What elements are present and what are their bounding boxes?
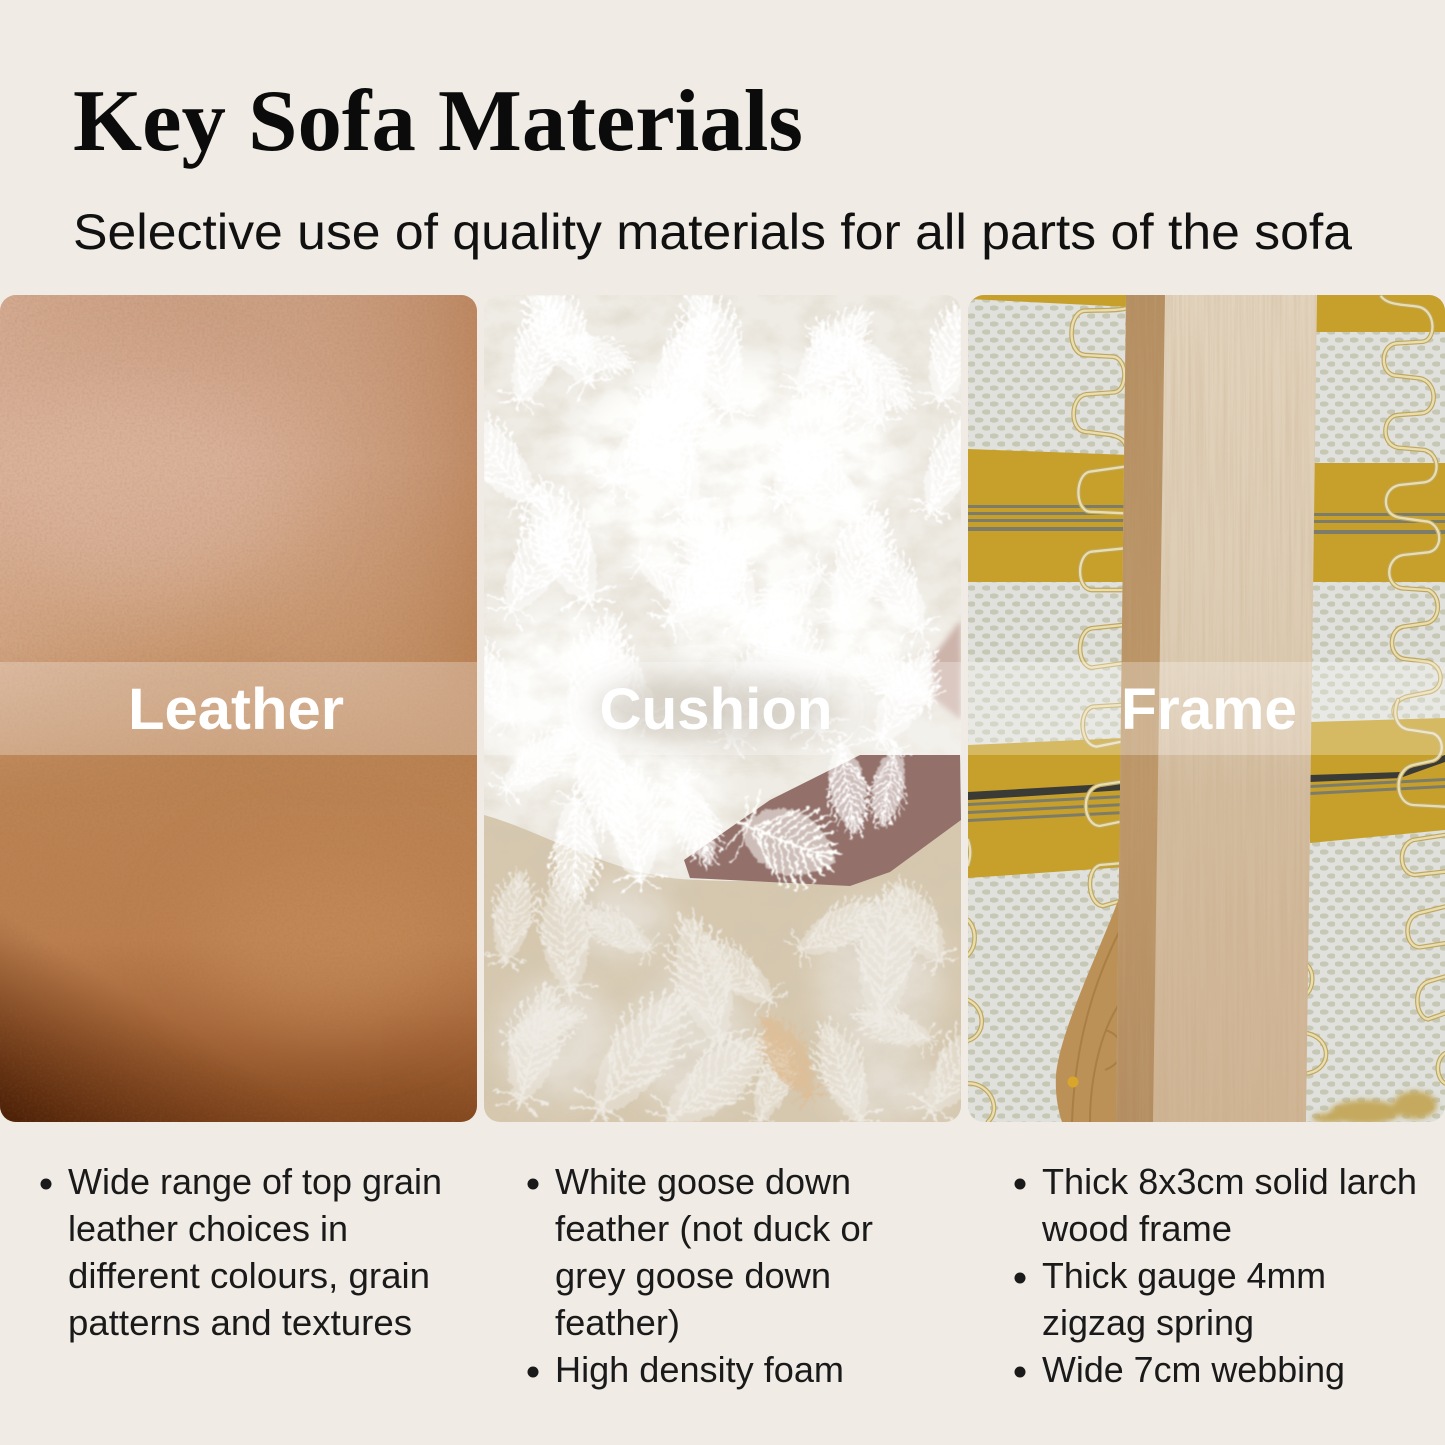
text block: frame bullets: Wide 7cm webbing xyxy=(1042,1349,1345,1390)
soft shade behind label xyxy=(591,678,841,738)
panel: leather xyxy=(0,295,477,1122)
panel: cushion xyxy=(429,260,1024,1154)
wood flare xyxy=(1056,898,1125,1122)
title: Key Sofa Materials xyxy=(73,73,803,170)
text block: cushion bullets: grey goose down xyxy=(555,1255,831,1296)
panel: frame xyxy=(968,295,1445,1124)
text block: frame bullets: wood frame xyxy=(1041,1208,1232,1249)
peach feather xyxy=(754,1008,830,1110)
hand xyxy=(684,755,961,886)
label band: frame: Frame xyxy=(1121,677,1297,742)
text block: cushion bullets: White goose down xyxy=(555,1161,851,1202)
text block: cushion bullets: High density foam xyxy=(555,1349,844,1390)
webbing xyxy=(968,295,1445,878)
subtitle: Selective use of quality materials for all parts of the sofa xyxy=(73,204,1352,260)
text block: leather bullets: Wide range of top grain xyxy=(68,1161,442,1202)
label band: cushion xyxy=(484,662,961,755)
label band: cushion: Cushion xyxy=(600,677,832,742)
text block: leather bullets: patterns and textures xyxy=(68,1302,412,1343)
text block: frame bullets xyxy=(1014,1161,1417,1390)
text block: cushion bullets xyxy=(528,1161,873,1390)
text block: frame bullets: zigzag spring xyxy=(1042,1302,1254,1343)
lower feathers xyxy=(484,866,961,1122)
text block: cushion bullets: feather) xyxy=(555,1302,680,1343)
text block: cushion bullets: feather (not duck or xyxy=(555,1208,873,1249)
feather on hand xyxy=(724,789,844,892)
text block: frame bullets: Thick gauge 4mm xyxy=(1042,1255,1326,1296)
lower beige base xyxy=(484,815,961,1122)
label band: frame xyxy=(968,662,1445,755)
label band: leather xyxy=(0,662,477,755)
text block: leather bullets xyxy=(40,1161,442,1343)
label band: leather: Leather xyxy=(128,677,344,742)
text block: leather bullets: leather choices in xyxy=(68,1208,348,1249)
upper white feathers xyxy=(484,295,961,908)
soft white mounds xyxy=(490,360,930,860)
text block: leather bullets: different colours, grain xyxy=(68,1255,430,1296)
text block: frame bullets: Thick 8x3cm solid larch xyxy=(1042,1161,1417,1202)
dried plant xyxy=(1312,1091,1437,1124)
springs xyxy=(1072,297,1440,716)
wood beam xyxy=(1116,295,1317,1122)
